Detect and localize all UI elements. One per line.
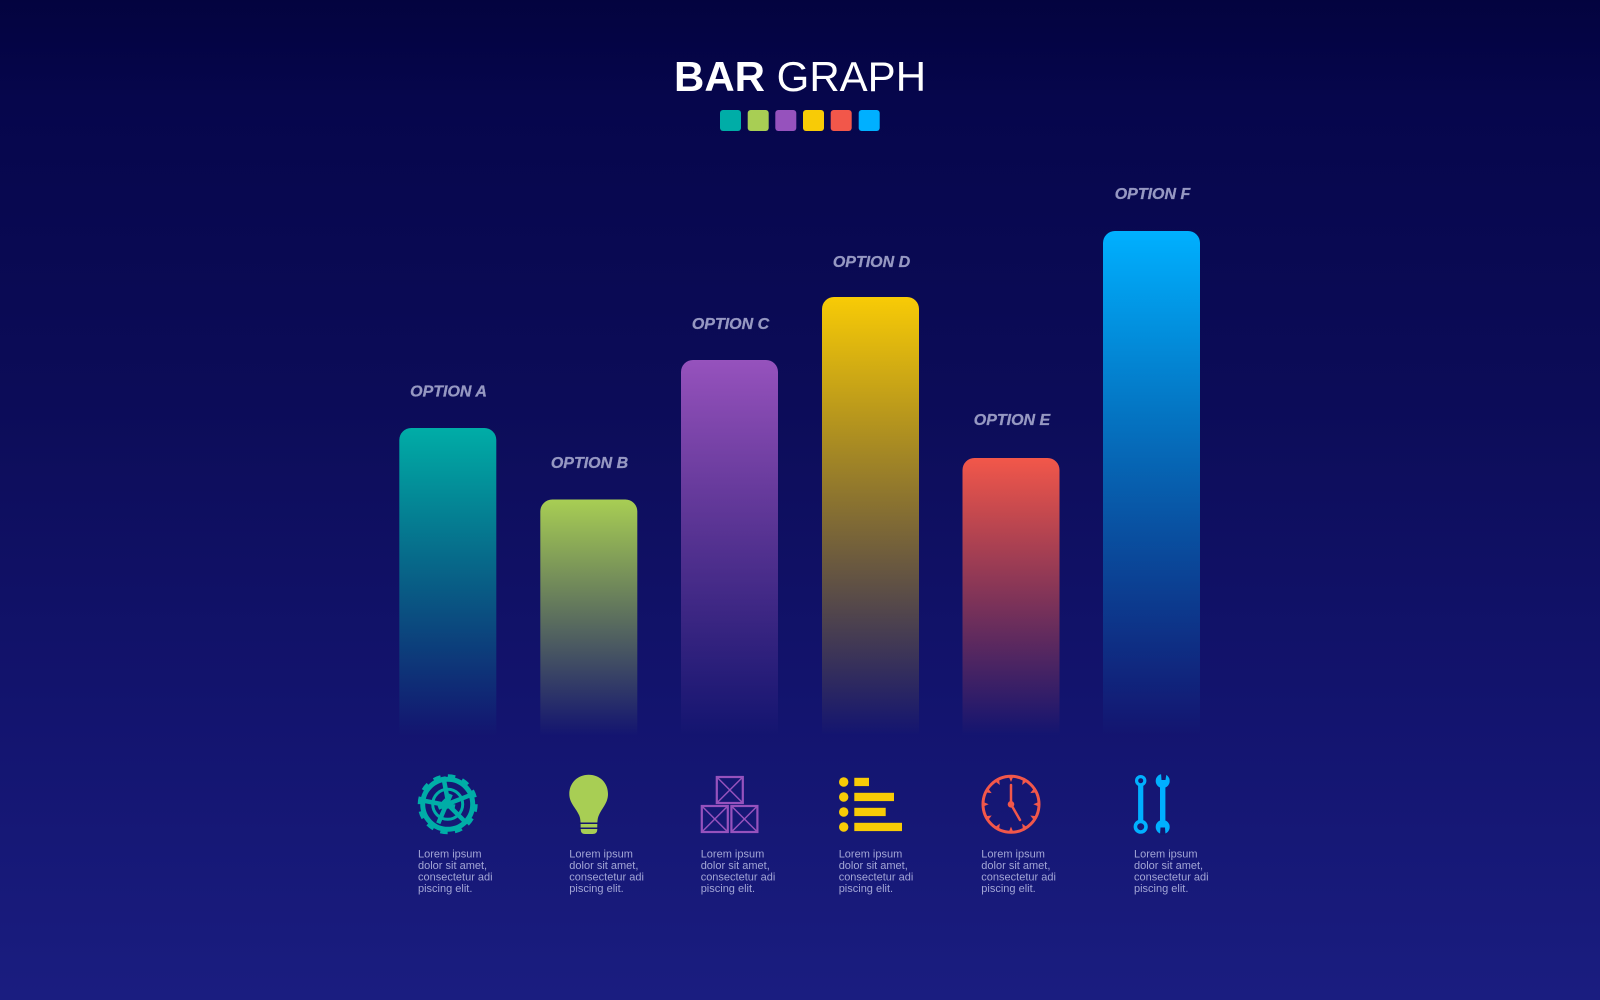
text: description F: piscing elit.	[1134, 883, 1188, 895]
text: description D: consectetur adi	[839, 872, 913, 884]
bar: option D	[822, 297, 919, 735]
label: option B: OPTION B	[551, 455, 628, 472]
text: description C: piscing elit.	[701, 883, 755, 895]
text: description A: consectetur adi	[418, 872, 493, 884]
text: description E: consectetur adi	[981, 872, 1056, 884]
text: description E: piscing elit.	[981, 883, 1036, 895]
icon: clock	[983, 776, 1039, 833]
label: option D: OPTION D	[833, 254, 911, 271]
label: option F: OPTION F	[1115, 186, 1192, 203]
icon: gear	[419, 776, 476, 833]
text: description D: dolor sit amet,	[839, 860, 908, 872]
text: description E: Lorem ipsum	[981, 849, 1045, 861]
text: description A: Lorem ipsum	[418, 849, 482, 861]
colour swatches	[720, 110, 880, 131]
text: description C: dolor sit amet,	[701, 860, 770, 872]
icon: list	[839, 777, 902, 832]
text: description F: Lorem ipsum	[1134, 849, 1198, 861]
icon: stacked boxes	[702, 777, 757, 832]
label: option A: OPTION A	[410, 384, 487, 400]
text: description C: consectetur adi	[701, 872, 775, 884]
label: option E: OPTION E	[974, 412, 1052, 429]
text: description C: Lorem ipsum	[701, 849, 764, 861]
text: description B: piscing elit.	[569, 883, 624, 895]
text: description E: dolor sit amet,	[981, 860, 1050, 872]
bar: option C	[681, 360, 778, 735]
bar chart	[399, 186, 1200, 735]
text: description F: dolor sit amet,	[1134, 860, 1203, 872]
bar: option A	[399, 428, 496, 735]
text: description D: Lorem ipsum	[839, 849, 902, 861]
icon: wrenches	[1135, 773, 1170, 835]
title: BAR GRAPH	[674, 53, 926, 100]
bar: option E	[962, 458, 1060, 735]
bar: option F	[1103, 231, 1200, 735]
bar: option B	[540, 500, 637, 735]
text: description A: piscing elit.	[418, 883, 472, 895]
label: option C: OPTION C	[692, 316, 770, 333]
text: description D: piscing elit.	[839, 883, 893, 895]
text: description B: dolor sit amet,	[569, 860, 638, 872]
text: description A: dolor sit amet,	[418, 860, 487, 872]
icon: light bulb	[569, 775, 608, 834]
text: description F: consectetur adi	[1134, 872, 1209, 884]
text: description B: consectetur adi	[569, 872, 644, 884]
text: description B: Lorem ipsum	[569, 849, 633, 861]
